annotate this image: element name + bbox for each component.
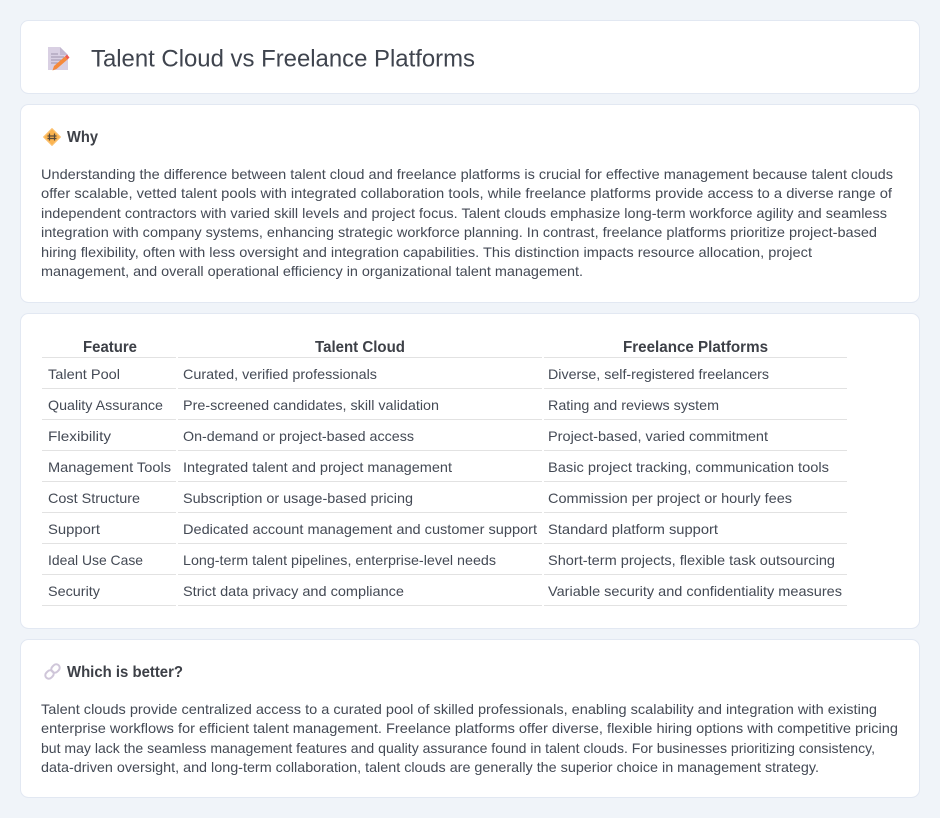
row: management tools: Integrated talent and project management [183,459,452,475]
row: support: Standard platform support [548,521,718,537]
row: flexibility: Project-based, varied commitment [548,428,768,444]
row: talent pool: Diverse, self-registered freelancers [548,366,769,382]
row: support: Dedicated account management and customer support [183,521,537,537]
panel: comparison table [20,314,920,628]
row: security: Strict data privacy and compliance [183,583,404,599]
text block: verdict: enterprise workflows for efficient talent management. Freelance platforms offer diverse, flexible hiring options with competitive pricing [41,720,898,736]
table header: Feature [83,339,137,356]
text block: verdict: but may lack the seamless management features and quality assurance found in talent clouds. For businesses prioritizing consistency, [41,740,875,756]
row: ideal use case: Short-term projects, flexible task outsourcing [548,552,835,568]
icon: road sign [44,128,60,146]
text block: why explanation: hiring flexibility, often with less oversight and integration capabilities. This distinction impacts resource allocation, project [41,244,812,260]
row: flexibility: Flexibility [48,428,111,444]
row: talent pool [48,366,769,382]
text block: why explanation: offer scalable, vetted talent pools with integrated collaboration tools, while freelance platforms provide access to a diverse range of [41,185,892,201]
row: talent pool: Talent Pool [48,366,120,382]
panel: why [20,104,920,302]
text block: why explanation: management, and overall operational efficiency in organizational talent management. [41,263,583,279]
row: security: Variable security and confidentiality measures [548,583,842,599]
row: flexibility: On-demand or project-based access [183,428,414,444]
row: support [48,521,718,537]
icon: chain link [44,663,61,680]
title: Talent Cloud vs Freelance Platforms [91,46,475,72]
row: ideal use case: Ideal Use Case [48,552,143,568]
row: ideal use case [48,552,835,568]
panel: which is better [20,640,920,798]
row: quality assurance: Rating and reviews system [548,397,719,413]
row: management tools: Management Tools [48,459,171,475]
row: cost structure: Subscription or usage-based pricing [183,490,413,506]
table row lines [42,358,847,606]
table header [83,339,768,356]
text block: why explanation: Understanding the difference between talent cloud and freelance platforms is crucial for effective management because talent clouds [41,166,893,182]
row: security [48,583,842,599]
icon: document with pencil [48,47,70,70]
row: cost structure [48,490,792,506]
row: talent pool: Curated, verified professionals [183,366,377,382]
table header: Freelance Platforms [623,339,768,356]
text block: why explanation: independent contractors with varied skill levels and project focus. Talent clouds emphasize long-term workforce agility and seamless [41,205,887,221]
heading: which is better: Which is better? [67,664,183,681]
text block: verdict: data-driven oversight, and long-term collaboration, talent clouds are generally the superior choice in management strategy. [41,759,819,775]
row: management tools: Basic project tracking, communication tools [548,459,829,475]
row: ideal use case: Long-term talent pipelines, enterprise-level needs [183,552,496,568]
text block: why explanation [41,166,893,279]
row: management tools [48,459,829,475]
row: quality assurance [48,397,719,413]
row: flexibility [48,428,768,444]
text block: why explanation: integration with company systems, enhancing strategic workforce planning. In contrast, freelance platforms prioritize project-based [41,224,877,240]
row: support: Support [48,521,100,537]
row: cost structure: Commission per project or hourly fees [548,490,792,506]
text block: verdict: Talent clouds provide centralized access to a curated pool of skilled professionals, enabling scalability and integration with existing [41,701,877,717]
row: quality assurance: Quality Assurance [48,397,163,413]
heading: why: Why [67,129,98,146]
row: quality assurance: Pre-screened candidates, skill validation [183,397,439,413]
panel: title header [20,20,920,94]
table header: Talent Cloud [315,339,405,356]
row: security: Security [48,583,100,599]
row: cost structure: Cost Structure [48,490,140,506]
text block: verdict [41,701,898,775]
